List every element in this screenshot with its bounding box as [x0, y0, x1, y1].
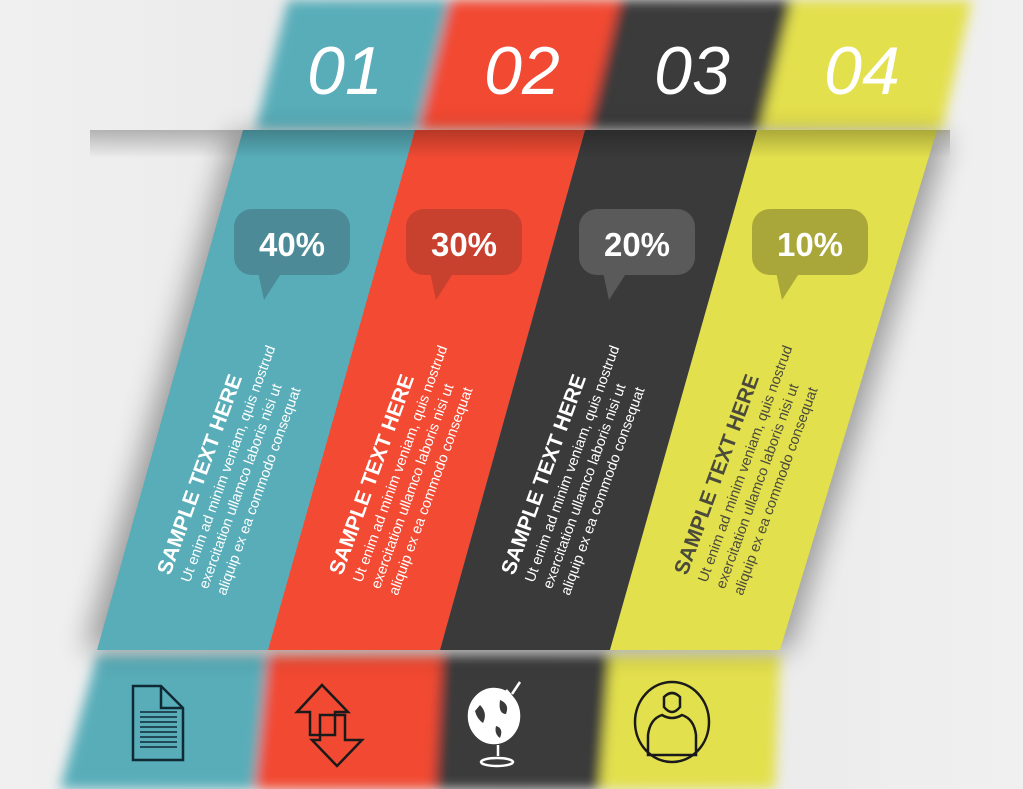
icon: document [133, 686, 183, 760]
icon: up/down arrows [297, 685, 362, 766]
rotated texts: SAMPLE TEXT HERE [325, 371, 419, 578]
top bands [255, 0, 972, 130]
numbers: 01 [307, 33, 383, 109]
rotated texts: aliquip ex ea commodo consequat [386, 385, 476, 598]
icon: person [635, 682, 709, 762]
rotated texts: Ut enim ad minim veniam, quis nostrud [695, 344, 796, 585]
rotated texts: SAMPLE TEXT HERE [153, 371, 247, 578]
rotated texts: Ut enim ad minim veniam, quis nostrud [522, 344, 623, 585]
rotated texts: exercitation ullamco laboris nisi ut [540, 382, 629, 591]
rotated texts: Ut enim ad minim veniam, quis nostrud [178, 344, 279, 585]
bubbles: 30% [431, 226, 497, 263]
numbers: 02 [484, 33, 560, 109]
rotated texts: aliquip ex ea commodo consequat [214, 385, 304, 598]
bubbles [234, 209, 868, 300]
rotated texts: SAMPLE TEXT HERE [670, 371, 764, 578]
middle shadow [85, 135, 948, 650]
rotated texts: exercitation ullamco laboris nisi ut [368, 382, 457, 591]
numbers: 03 [654, 33, 730, 109]
bubbles: 20% [604, 226, 670, 263]
rotated texts: SAMPLE TEXT HERE [497, 371, 591, 578]
rotated texts: exercitation ullamco laboris nisi ut [196, 382, 285, 591]
icon: globe [469, 682, 520, 766]
middle bands [90, 130, 950, 650]
bottom bands [60, 655, 780, 789]
rotated texts [153, 334, 832, 598]
rotated texts: Ut enim ad minim veniam, quis nostrud [350, 344, 451, 585]
numbers [307, 33, 900, 109]
bubbles: 40% [259, 226, 325, 263]
numbers: 04 [824, 33, 900, 109]
rotated texts: aliquip ex ea commodo consequat [558, 385, 648, 598]
rotated texts: aliquip ex ea commodo consequat [731, 385, 821, 598]
rotated texts: exercitation ullamco laboris nisi ut [713, 382, 802, 591]
bubbles: 10% [777, 226, 843, 263]
